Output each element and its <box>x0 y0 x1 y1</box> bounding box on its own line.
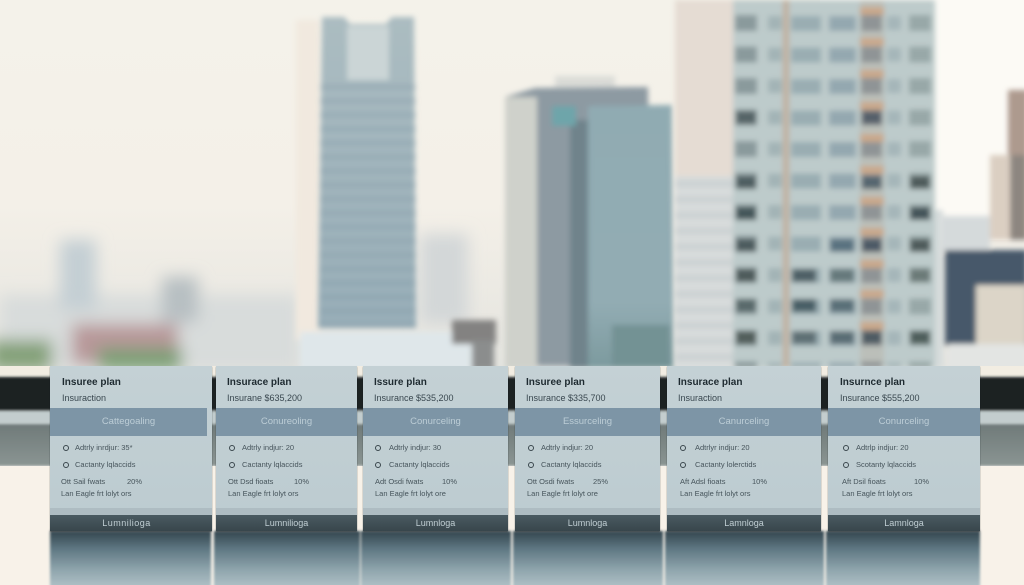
card 6 band <box>828 408 980 436</box>
card 3 feature two: Cactanty lqlaccids <box>389 460 449 469</box>
card 6 note: Lan Eagle frt lolyt ors <box>842 489 912 498</box>
card 2 note: Lan Eagle frt lolyt ors <box>228 489 298 498</box>
card 5 footer: Lamnloga <box>724 518 764 528</box>
card 3 feature one: Adtrly indjur: 30 <box>389 443 441 452</box>
distant right buildings <box>940 90 1024 370</box>
card 6 rate value: 10% <box>914 477 929 486</box>
card 5 footer <box>667 515 821 531</box>
card 2 footer: Lumnilioga <box>265 518 308 528</box>
card 6 feature one: Adtrlp indjur: 20 <box>856 443 909 452</box>
card 5: insurance plan <box>667 366 821 531</box>
card 1 footer <box>50 515 212 531</box>
card 5 band <box>667 408 821 436</box>
card 1 bullet two <box>63 462 69 468</box>
card 4 bullet one <box>528 445 534 451</box>
card 2 rate value: 10% <box>294 477 309 486</box>
card 4 note: Lan Eagle frt lolyt ore <box>527 489 598 498</box>
card 3 rate value: 10% <box>442 477 457 486</box>
card 6 rate label: Aft Dsil fioats <box>842 477 886 486</box>
card 1 bullet one <box>63 445 69 451</box>
card 3 subtitle: Insurance $535,200 <box>374 393 454 403</box>
card 4 feature one: Adtrly indjur: 20 <box>541 443 593 452</box>
card 4 rate label: Ott Osdi fwats <box>527 477 574 486</box>
card 4: insurance plan <box>515 366 660 531</box>
card 6 bullet two <box>843 462 849 468</box>
card 4 footer <box>515 515 660 531</box>
table top <box>0 466 1024 585</box>
card 2 footer <box>216 515 357 531</box>
card 2 band <box>216 408 357 436</box>
card 1 footer: Lumnilioga <box>102 518 151 528</box>
card 2: insurance plan <box>216 366 357 531</box>
card 3 band <box>363 408 508 436</box>
table reflection of the cards <box>50 531 980 585</box>
card 5 bullet two <box>680 462 686 468</box>
card 4 rate value: 25% <box>593 477 608 486</box>
card 4 band: Essurceling <box>563 416 612 427</box>
card 5 rate label: Aft Adsl fioats <box>680 477 725 486</box>
card 2 feature two: Cactanty lqlaccids <box>242 460 302 469</box>
card 4 title: Insuree plan <box>526 377 585 388</box>
card 2 feature one: Adtrly indjur: 20 <box>242 443 294 452</box>
card 1: insurance plan <box>50 366 212 531</box>
card 5 subtitle: Insuraction <box>678 393 722 403</box>
card 3 bullet one <box>375 445 381 451</box>
card 3 band: Conurceling <box>410 416 461 427</box>
card 4 subtitle: Insurance $335,700 <box>526 393 606 403</box>
card 6 title: Insurnce plan <box>840 377 905 388</box>
card 3 bullet two <box>375 462 381 468</box>
card 3 note: Lan Eagle frt lolyt ore <box>375 489 446 498</box>
card 4 band <box>515 408 660 436</box>
card 3 title: Issure plan <box>374 377 427 388</box>
card 5 note: Lan Eagle frt lolyt ors <box>680 489 750 498</box>
card 2 title: Insurace plan <box>227 377 291 388</box>
card 6 footer: Lamnloga <box>884 518 924 528</box>
card 1 feature two: Cactanty lqlaccids <box>75 460 135 469</box>
card 1 band <box>50 408 207 436</box>
card 6 feature two: Scotanty lqlaccids <box>856 460 916 469</box>
card 1 subtitle: Insuraction <box>62 393 106 403</box>
card 5 bullet one <box>680 445 686 451</box>
tower <box>318 17 416 328</box>
card 2 band: Conureoling <box>261 416 312 427</box>
card 3 footer: Lumnloga <box>416 518 455 528</box>
card 5 feature two: Cactanty lolerctids <box>695 460 756 469</box>
railing <box>0 366 1024 377</box>
card 3 rate label: Adt Osdi fwats <box>375 477 423 486</box>
mid-rise buildings <box>505 87 674 369</box>
card 4 feature two: Cactanty lqlaccids <box>541 460 601 469</box>
card 3 footer <box>363 515 508 531</box>
card 4 footer: Lumnloga <box>568 518 607 528</box>
card 5 feature one: Adtrlyr indjur: 20 <box>695 443 750 452</box>
card 1 rate value: 20% <box>127 477 142 486</box>
card 6 band: Conurceling <box>879 416 929 427</box>
card 1 band: Cattegoaling <box>102 416 155 427</box>
card 6 subtitle: Insurance $555,200 <box>840 393 920 403</box>
card 2 subtitle: Insurane $635,200 <box>227 393 302 403</box>
card 4 bullet two <box>528 462 534 468</box>
card 1 rate label: Ott Sail fwats <box>61 477 105 486</box>
card 6: insurance plan <box>828 366 980 531</box>
card 5 band: Canurceling <box>719 416 769 427</box>
card 5 rate value: 10% <box>752 477 767 486</box>
card 1 feature one: Adtrly inrdjur: 35* <box>75 443 133 452</box>
card 1 note: Lan Eagle frt lolyt ors <box>61 489 131 498</box>
card 5 title: Insurace plan <box>678 377 742 388</box>
card 2 bullet two <box>229 462 235 468</box>
card 6 footer <box>828 515 980 531</box>
card 2 rate label: Ott Dsd fioats <box>228 477 273 486</box>
card 6 bullet one <box>843 445 849 451</box>
card 1 title: Insuree plan <box>62 377 121 388</box>
card 2 bullet one <box>229 445 235 451</box>
card 3: insurance plan <box>363 366 508 531</box>
high-rise with windows <box>675 0 943 368</box>
